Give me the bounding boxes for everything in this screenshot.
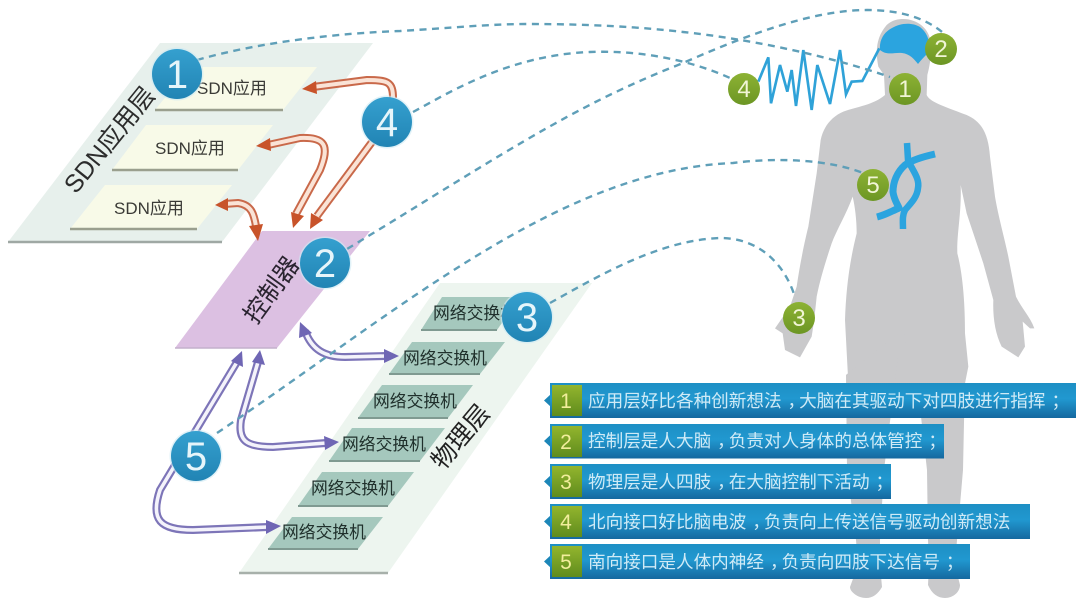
app card 1: SDN应用 — [197, 79, 267, 98]
legend bar 3: 物理层是人四肢 ，在大脑控制下活动 ； — [588, 472, 893, 492]
legend bar 4: 北向接口好比脑电波 ，负责向上传送信号驱动创新想法 — [588, 512, 1010, 532]
switch 4 — [329, 428, 445, 461]
green badge 4 — [728, 73, 760, 105]
legend bar 2: 控制层是人大脑 ，负责对人身体的总体管控 ； — [588, 431, 946, 451]
green badge 2 — [925, 33, 957, 65]
blue badge 5 — [170, 430, 222, 482]
switch 5: 网络交换机 — [311, 479, 395, 498]
blue badge 4 — [360, 96, 414, 148]
icon: brain — [880, 24, 930, 64]
legend bar 5 — [544, 544, 970, 579]
controller label: 控制器 — [239, 252, 305, 329]
green badge 5 — [857, 169, 889, 201]
blue badge 2 — [298, 236, 352, 290]
legend bar 1: 应用层好比各种创新想法 ，大脑在其驱动下对四肢进行指挥 ； — [588, 391, 1069, 411]
app card 2: SDN应用 — [155, 139, 225, 158]
brain wave — [758, 48, 879, 110]
blue badge 1 — [150, 48, 204, 100]
legend bar 1 — [544, 383, 1076, 418]
blue badge 3: 3 — [516, 296, 538, 340]
dashed connector: physical layer to hand — [550, 238, 795, 303]
physical layer plane — [239, 283, 592, 573]
legend bar 1: 1 — [560, 390, 572, 413]
green badge 3: 3 — [792, 305, 806, 332]
controller plane — [175, 231, 370, 348]
blue badge 4: 4 — [376, 101, 398, 145]
physical layer title: 物理层 — [426, 399, 496, 475]
legend bar 2 — [544, 424, 946, 458]
legend bar 5: 5 — [560, 551, 572, 574]
legend bar 5: 南向接口是人体内神经 ，负责向四肢下达信号 ； — [588, 552, 964, 572]
app card 3: SDN应用 — [114, 199, 184, 218]
switch 4: 网络交换机 — [342, 435, 426, 454]
switch 2 — [389, 342, 505, 374]
green badge 5: 5 — [866, 172, 880, 199]
switch 6: 网络交换机 — [282, 523, 366, 542]
green badge 1: 1 — [898, 76, 912, 103]
switch 6 — [268, 517, 383, 549]
blue badge 1: 1 — [166, 53, 188, 97]
arrowheads — [215, 81, 323, 241]
switch 3: 网络交换机 — [373, 392, 457, 411]
app layer title: SDN应用层 — [59, 82, 161, 199]
switch 1: 网络交换机 — [433, 304, 517, 323]
green badge 3 — [783, 302, 815, 334]
app card 1 — [155, 67, 317, 110]
blue badge 3 — [500, 290, 554, 344]
app card 2 — [112, 125, 273, 170]
switch 5 — [298, 472, 414, 506]
arrowheads — [231, 322, 399, 534]
northbound arrows — [215, 80, 393, 241]
green badge 2: 2 — [934, 36, 948, 63]
legend bar 4: 4 — [560, 511, 572, 534]
icon: nerve helix — [877, 143, 935, 229]
green badge 1 — [889, 73, 921, 105]
dashed connector: northbound to brain wave — [413, 52, 730, 112]
dashed connector: controller to brain — [347, 10, 942, 249]
switch 2: 网络交换机 — [403, 349, 487, 368]
blue badge 5: 5 — [185, 435, 207, 479]
blue badge 2: 2 — [314, 242, 336, 286]
app card 3 — [70, 185, 232, 229]
legend bar 3 — [544, 464, 893, 499]
green badge 4: 4 — [737, 76, 751, 103]
human body silhouette — [775, 19, 1034, 598]
app layer plane — [8, 43, 373, 242]
dashed connector: southbound to nerves — [217, 160, 863, 433]
legend bar 3: 3 — [560, 471, 572, 494]
dashed connector: application layer to head — [197, 24, 890, 77]
switch 3 — [358, 385, 473, 418]
legend bar 2: 2 — [560, 431, 572, 454]
switch 1 — [421, 297, 520, 330]
southbound arrows — [156, 322, 399, 534]
legend bar 4 — [544, 504, 1030, 539]
